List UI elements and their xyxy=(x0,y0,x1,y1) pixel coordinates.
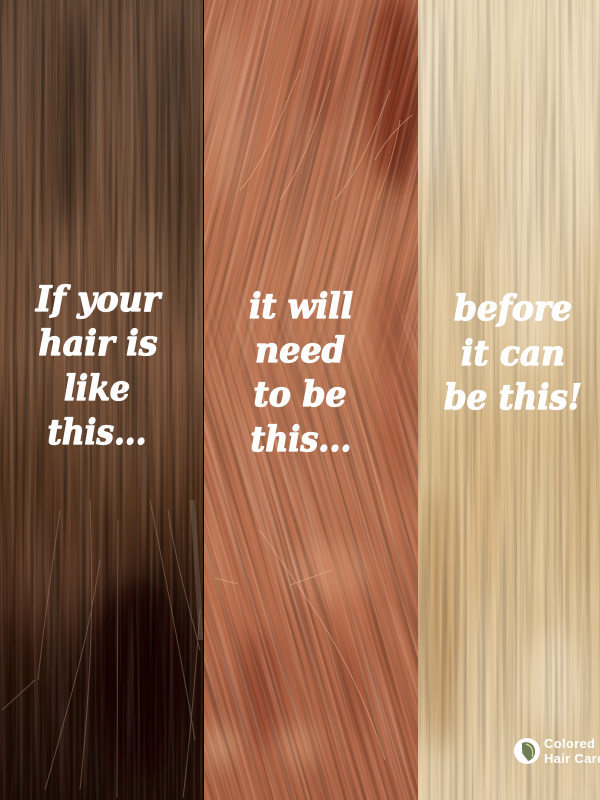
panel: copper red hair xyxy=(204,0,418,800)
text: second column caption: it will xyxy=(249,286,353,327)
text: first column caption: like xyxy=(64,368,130,409)
text: first column caption: If your xyxy=(35,279,162,320)
text: first column caption: this... xyxy=(48,412,146,453)
text: first column caption xyxy=(35,279,162,453)
text: third column caption: before xyxy=(454,288,572,329)
panel: dark brown hair xyxy=(0,0,203,800)
text: second column caption xyxy=(249,286,353,460)
text: first column caption: hair is xyxy=(38,323,158,364)
logo: Colored Hair Care xyxy=(514,736,600,766)
text: second column caption: need xyxy=(255,330,345,371)
icon: woman's head with leaf hair xyxy=(514,738,540,764)
text: third column caption: it can xyxy=(461,333,565,374)
brand name: Colored xyxy=(544,736,595,751)
text: second column caption: this... xyxy=(250,419,352,460)
text: third column caption: be this! xyxy=(444,377,582,418)
text: third column caption xyxy=(444,288,582,418)
text: second column caption: to be xyxy=(254,374,346,415)
panel: blonde hair xyxy=(418,0,600,800)
